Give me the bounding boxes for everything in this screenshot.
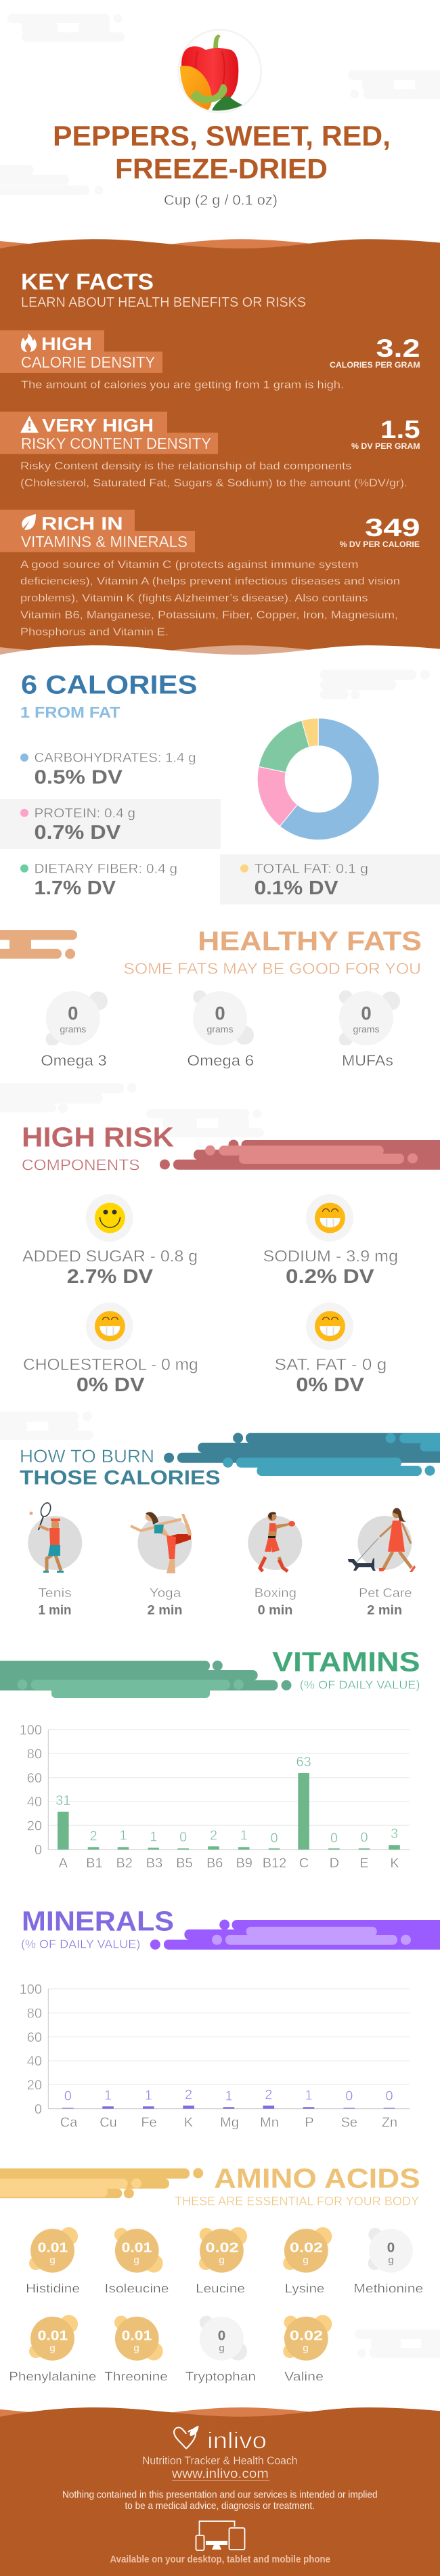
logo: inlivo — [174, 2426, 267, 2454]
panel: calories — [0, 670, 440, 904]
bar chart: vitamins: 1 — [150, 1829, 157, 1844]
heading: healthy fats: HEALTHY FATS — [198, 926, 422, 956]
icon: grinning face — [95, 1311, 125, 1341]
bar chart: vitamins: 31 — [56, 1793, 70, 1808]
bar chart: vitamins: 1 — [119, 1828, 127, 1843]
bar chart: minerals: 100 — [20, 1982, 42, 1997]
heading: high risk: HIGH RISK — [22, 1121, 174, 1152]
donut chart: macronutrients — [257, 718, 379, 840]
heading: calories — [20, 670, 198, 721]
fat: omega 6: Omega 6 — [187, 1052, 254, 1069]
heading: healthy fats — [123, 926, 422, 978]
heading: amino acids — [175, 2163, 420, 2208]
bar chart: minerals: Zn — [382, 2116, 397, 2131]
disclaimer — [62, 2489, 378, 2512]
bar chart: vitamins: K — [390, 1856, 399, 1871]
bar chart: vitamins: B12 — [263, 1856, 286, 1871]
activity: yoga — [131, 1512, 192, 1617]
ribbon: minerals — [150, 1920, 440, 1950]
heading: vitamins: (% OF DAILY VALUE) — [300, 1678, 420, 1691]
icon: woman walking dog — [348, 1508, 416, 1572]
risk: added sugar — [22, 1194, 198, 1288]
heading: key facts: KEY FACTS — [21, 270, 154, 295]
bar chart: minerals: 80 — [27, 2007, 42, 2022]
fact: risky content density: 1.5 — [380, 416, 420, 443]
fact: vitamins and minerals: Phosphorus and Vitamin E. — [20, 626, 169, 638]
legend: protein: PROTEIN: 0.4 g — [34, 806, 135, 821]
bar chart: vitamins: 80 — [27, 1747, 42, 1762]
bar chart: minerals: 1 — [225, 2089, 232, 2104]
risk: cholesterol: CHOLESTEROL - 0 mg — [23, 1355, 198, 1374]
bar chart: minerals: 0 — [64, 2089, 72, 2104]
activity: boxing — [248, 1512, 302, 1617]
bar chart: minerals: 1 — [305, 2089, 313, 2103]
amino acid: valine: g — [303, 2342, 309, 2354]
amino acid: valine — [283, 2315, 332, 2384]
fact: risky content density: RISKY CONTENT DENSITY — [21, 435, 211, 452]
risk: cholesterol: 0% DV — [76, 1374, 145, 1396]
title — [53, 120, 391, 184]
logo: inlivo: inlivo — [207, 2428, 267, 2454]
fact: calorie density: CALORIES PER GRAM — [330, 360, 420, 370]
icon: smiling face — [95, 1203, 125, 1233]
heading: healthy fats: SOME FATS MAY BE GOOD FOR YOU — [123, 960, 421, 978]
risk: cholesterol — [23, 1303, 198, 1396]
activity: pet care: 2 min — [367, 1603, 402, 1617]
amino acid: threonine — [104, 2315, 168, 2384]
amino acid: methionine: Methionine — [353, 2282, 423, 2296]
activity: pet care: Pet Care — [359, 1586, 412, 1600]
disclaimer: Nothing contained in this presentation and our services is intended or implied — [62, 2489, 378, 2500]
amino acid: tryptophan — [185, 2315, 256, 2384]
ribbon: burn calories — [164, 1433, 440, 1476]
icon: peppers in a circle — [179, 30, 261, 112]
bar chart: vitamins: 20 — [27, 1818, 42, 1833]
heading: vitamins — [272, 1646, 420, 1691]
title: PEPPERS, SWEET, RED, — [53, 120, 391, 152]
heading: minerals: MINERALS — [22, 1906, 174, 1937]
fact: calorie density: CALORIE DENSITY — [21, 353, 155, 371]
bar chart: minerals: Mn — [260, 2116, 279, 2131]
activity: boxing: 0 min — [258, 1603, 292, 1617]
heading: calories: 1 FROM FAT — [20, 703, 120, 721]
bar chart: vitamins: A — [59, 1856, 68, 1871]
risk: sodium: 0.2% DV — [286, 1266, 374, 1288]
amino acid: tryptophan: Tryptophan — [185, 2370, 256, 2384]
legend: carbohydrates — [20, 751, 196, 788]
amino acid: isoleucine: 0.01 — [122, 2240, 152, 2256]
bar chart: vitamins: 0 — [179, 1830, 187, 1845]
bar chart: vitamins: 3 — [391, 1827, 398, 1841]
fat: mufas: grams — [353, 1024, 379, 1034]
icon: flame — [21, 333, 37, 352]
fact: vitamins and minerals: % DV PER CALORIE — [340, 540, 420, 549]
heading: minerals: (% OF DAILY VALUE) — [21, 1937, 140, 1950]
amino acid: tryptophan: g — [219, 2342, 225, 2354]
bar chart: vitamins: B3 — [146, 1856, 162, 1871]
serving size: Cup (2 g / 0.1 oz) — [164, 193, 278, 209]
icon: yoga pose — [131, 1512, 192, 1573]
bar chart: minerals: Mg — [220, 2116, 239, 2131]
bar chart: vitamins — [20, 1723, 410, 1871]
heading: high risk: COMPONENTS — [22, 1156, 139, 1173]
panel: high risk components — [22, 1121, 440, 1396]
fat: omega 3: 0 — [68, 1003, 78, 1024]
panel: vitamins — [0, 1646, 420, 1871]
activity: tennis: Tenis — [38, 1586, 72, 1600]
fat: omega 6: 0 — [215, 1003, 225, 1024]
bar chart: minerals: 1 — [145, 2089, 152, 2103]
amino acid: leucine — [196, 2227, 247, 2296]
legend: protein — [20, 806, 135, 844]
fact: vitamins and minerals: deficiencies), Vitamin A (helps prevent infectious diseases and vision — [20, 576, 400, 588]
fact: calorie density: 3.2 — [376, 334, 420, 362]
heading: burn calories: THOSE CALORIES — [20, 1467, 221, 1489]
legend: dietary fiber: 1.7% DV — [34, 877, 116, 899]
bar chart: minerals: 60 — [27, 2030, 42, 2045]
fact: risky content density: (Cholesterol, Saturated Fat, Sugars & Sodium) to the amount (%DV/gr). — [20, 478, 408, 489]
disclaimer: to be a medical advice, diagnosis or treatment. — [125, 2501, 315, 2512]
fact: vitamins and minerals: Vitamin B6, Manganese, Potassium, Fiber, Copper, Iron, Magnesium, — [20, 609, 398, 621]
bar chart: minerals: 2 — [265, 2088, 272, 2103]
risk: saturated fat: 0% DV — [296, 1374, 364, 1396]
heading: amino acids: AMINO ACIDS — [214, 2163, 420, 2194]
panel: healthy fats — [0, 926, 422, 1069]
amino acid: lysine: g — [303, 2254, 309, 2266]
amino acid: isoleucine — [104, 2228, 169, 2296]
amino acid: isoleucine: Isoleucine — [104, 2282, 169, 2296]
risk: saturated fat: SAT. FAT - 0 g — [275, 1355, 387, 1374]
fat: mufas — [339, 990, 400, 1069]
bar chart: vitamins: D — [330, 1856, 339, 1871]
legend: carbohydrates: 0.5% DV — [34, 766, 123, 788]
risk: added sugar: ADDED SUGAR - 0.8 g — [22, 1247, 198, 1265]
legend: total fat: 0.1% DV — [255, 877, 338, 899]
amino acid: valine: 0.02 — [290, 2328, 323, 2344]
icon: boxer — [260, 1512, 295, 1571]
activity: tennis — [28, 1502, 82, 1617]
bar chart: minerals: K — [184, 2116, 194, 2131]
fat: omega 6: grams — [207, 1024, 233, 1034]
bar chart: vitamins: 0 — [330, 1831, 338, 1846]
ribbon: healthy fats — [0, 930, 77, 959]
amino acid: phenylalanine: 0.01 — [38, 2328, 68, 2344]
icon: grinning face — [315, 1311, 345, 1341]
fat: omega 3: grams — [60, 1024, 86, 1034]
activity: pet care — [348, 1508, 416, 1617]
amino acid: lysine — [283, 2227, 332, 2296]
icon: tennis player — [30, 1502, 64, 1573]
amino acid: histidine: g — [49, 2254, 56, 2266]
fact: risky content density: VERY HIGH — [42, 415, 154, 435]
activity: tennis: 1 min — [38, 1603, 72, 1617]
amino acid: phenylalanine: g — [49, 2342, 56, 2354]
amino acid: isoleucine: g — [133, 2254, 139, 2266]
title: FREEZE-DRIED — [115, 152, 328, 184]
heading: burn calories: HOW TO BURN — [20, 1446, 154, 1466]
amino acid: histidine — [26, 2227, 80, 2296]
bar chart: vitamins: 2 — [89, 1829, 97, 1843]
heading: vitamins: VITAMINS — [272, 1646, 420, 1677]
bar chart: vitamins: B1 — [86, 1856, 103, 1871]
bar chart: minerals: 40 — [27, 2054, 42, 2069]
amino acid: lysine: 0.02 — [290, 2240, 323, 2256]
fat: mufas: MUFAs — [342, 1052, 393, 1069]
fat: mufas: 0 — [361, 1003, 372, 1024]
amino acid: threonine: Threonine — [104, 2370, 168, 2384]
heading: calories: 6 CALORIES — [21, 670, 198, 699]
icon: leaf — [22, 514, 36, 530]
amino acid: phenylalanine — [9, 2315, 96, 2384]
bar chart: vitamins: B2 — [116, 1856, 133, 1871]
fact: vitamins and minerals: 349 — [365, 514, 420, 542]
risk: added sugar: 2.7% DV — [67, 1266, 153, 1288]
risk: sodium — [263, 1194, 398, 1288]
heading: minerals — [21, 1906, 174, 1950]
bar chart: vitamins: 60 — [27, 1771, 42, 1786]
bar chart: minerals: Fe — [141, 2116, 157, 2131]
activity: boxing: Boxing — [255, 1586, 296, 1600]
bar chart: minerals: 0 — [345, 2089, 353, 2104]
heading: burn calories — [20, 1446, 221, 1489]
bar chart: vitamins: B9 — [236, 1856, 252, 1871]
panel: amino acids — [0, 2163, 423, 2384]
bar chart: minerals — [20, 1982, 410, 2131]
amino acid: histidine: Histidine — [26, 2282, 80, 2296]
tagline: Nutrition Tracker & Health Coach — [142, 2454, 298, 2467]
bar chart: minerals: 20 — [27, 2078, 42, 2093]
risk: saturated fat — [275, 1303, 387, 1396]
bar chart: vitamins: C — [299, 1856, 309, 1871]
legend: dietary fiber: DIETARY FIBER: 0.4 g — [34, 861, 177, 876]
amino acid: methionine: 0 — [387, 2240, 395, 2256]
panel: key facts — [0, 239, 440, 663]
panel: minerals — [20, 1906, 440, 2131]
heading: amino acids: THESE ARE ESSENTIAL FOR YOUR BODY — [175, 2193, 419, 2208]
fat: omega 3 — [41, 991, 108, 1069]
panel: footer — [0, 2407, 440, 2576]
ribbon: high risk — [160, 1140, 440, 1170]
bar chart: minerals: 0 — [385, 2089, 393, 2104]
amino acid: histidine: 0.01 — [38, 2240, 68, 2256]
amino acid: leucine: Leucine — [196, 2282, 245, 2296]
bar chart: minerals: 2 — [185, 2088, 192, 2103]
fact: risky content density: Risky Content density is the relationship of bad components — [20, 461, 352, 473]
amino acid: leucine: g — [219, 2254, 225, 2266]
amino acid: lysine: Lysine — [285, 2282, 324, 2296]
legend: total fat: TOTAL FAT: 0.1 g — [255, 861, 368, 876]
fact: vitamins and minerals — [0, 510, 420, 638]
fact: calorie density: The amount of calories you are getting from 1 gram is high. — [21, 379, 344, 391]
fact: vitamins and minerals: RICH IN — [41, 513, 123, 533]
bar chart: minerals: 1 — [104, 2089, 112, 2103]
fat: omega 3: Omega 3 — [41, 1052, 107, 1069]
icon: grinning face — [315, 1203, 345, 1233]
bar chart: vitamins: B6 — [206, 1856, 223, 1871]
bar chart: minerals: Se — [341, 2116, 357, 2131]
bar chart: vitamins: 0 — [270, 1831, 278, 1846]
bar chart: minerals: P — [305, 2116, 314, 2131]
fact: calorie density — [0, 330, 420, 391]
bar chart: vitamins: B5 — [176, 1856, 193, 1871]
bar chart: vitamins: 1 — [240, 1828, 248, 1843]
legend: carbohydrates: CARBOHYDRATES: 1.4 g — [34, 751, 196, 766]
legend: protein: 0.7% DV — [34, 822, 120, 844]
amino acid: threonine: g — [133, 2342, 139, 2354]
bar chart: minerals: Cu — [100, 2116, 117, 2131]
activity: yoga: 2 min — [148, 1603, 183, 1617]
risk: sodium: SODIUM - 3.9 mg — [263, 1247, 398, 1265]
heading: high risk — [22, 1121, 174, 1173]
ribbon: vitamins — [0, 1661, 291, 1698]
bar chart: vitamins: 40 — [27, 1795, 42, 1810]
availability note: Available on your desktop, tablet and mobile phone — [110, 2554, 330, 2565]
heading: key facts — [21, 270, 306, 310]
bar chart: vitamins: 0 — [35, 1843, 42, 1858]
amino acid: valine: Valine — [284, 2370, 324, 2384]
amino acid: phenylalanine: Phenylalanine — [9, 2370, 96, 2384]
activity: yoga: Yoga — [150, 1586, 181, 1600]
amino acid: leucine: 0.02 — [206, 2240, 238, 2256]
icon: warning triangle — [20, 416, 39, 433]
amino acid: threonine: 0.01 — [122, 2328, 152, 2344]
fact: vitamins and minerals: A good source of Vitamin C (protects against immune system — [20, 559, 358, 571]
bar chart: vitamins: 63 — [296, 1755, 311, 1770]
bar chart: vitamins: E — [359, 1856, 369, 1871]
bar chart: minerals: Ca — [60, 2116, 78, 2131]
legend: total fat — [240, 861, 368, 899]
website link: www.inlivo.com — [171, 2467, 269, 2481]
fact: risky content density: % DV PER GRAM — [351, 441, 420, 451]
icon: desktop, tablet and phone — [196, 2521, 245, 2550]
bar chart: minerals: 0 — [35, 2102, 42, 2117]
bar chart: vitamins: 100 — [20, 1723, 42, 1738]
fact: vitamins and minerals: problems), Vitamin K (fights Alzheimer’s disease). Also contains — [20, 593, 368, 605]
heading: key facts: LEARN ABOUT HEALTH BENEFITS OR RISKS — [21, 295, 306, 310]
amino acid: methionine — [353, 2228, 423, 2296]
bar chart: vitamins: 2 — [210, 1828, 217, 1843]
amino acid: tryptophan: 0 — [218, 2328, 225, 2344]
ribbon: amino acids — [0, 2168, 203, 2198]
fact: vitamins and minerals: VITAMINS & MINERALS — [21, 533, 188, 550]
fact: calorie density: HIGH — [41, 334, 92, 354]
fact: risky content density — [0, 412, 420, 489]
bar chart: vitamins: 0 — [360, 1831, 368, 1846]
panel: how to burn those calories — [20, 1433, 440, 1617]
legend: dietary fiber — [20, 861, 177, 899]
fat: omega 6 — [187, 990, 254, 1069]
amino acid: methionine: g — [388, 2254, 394, 2266]
